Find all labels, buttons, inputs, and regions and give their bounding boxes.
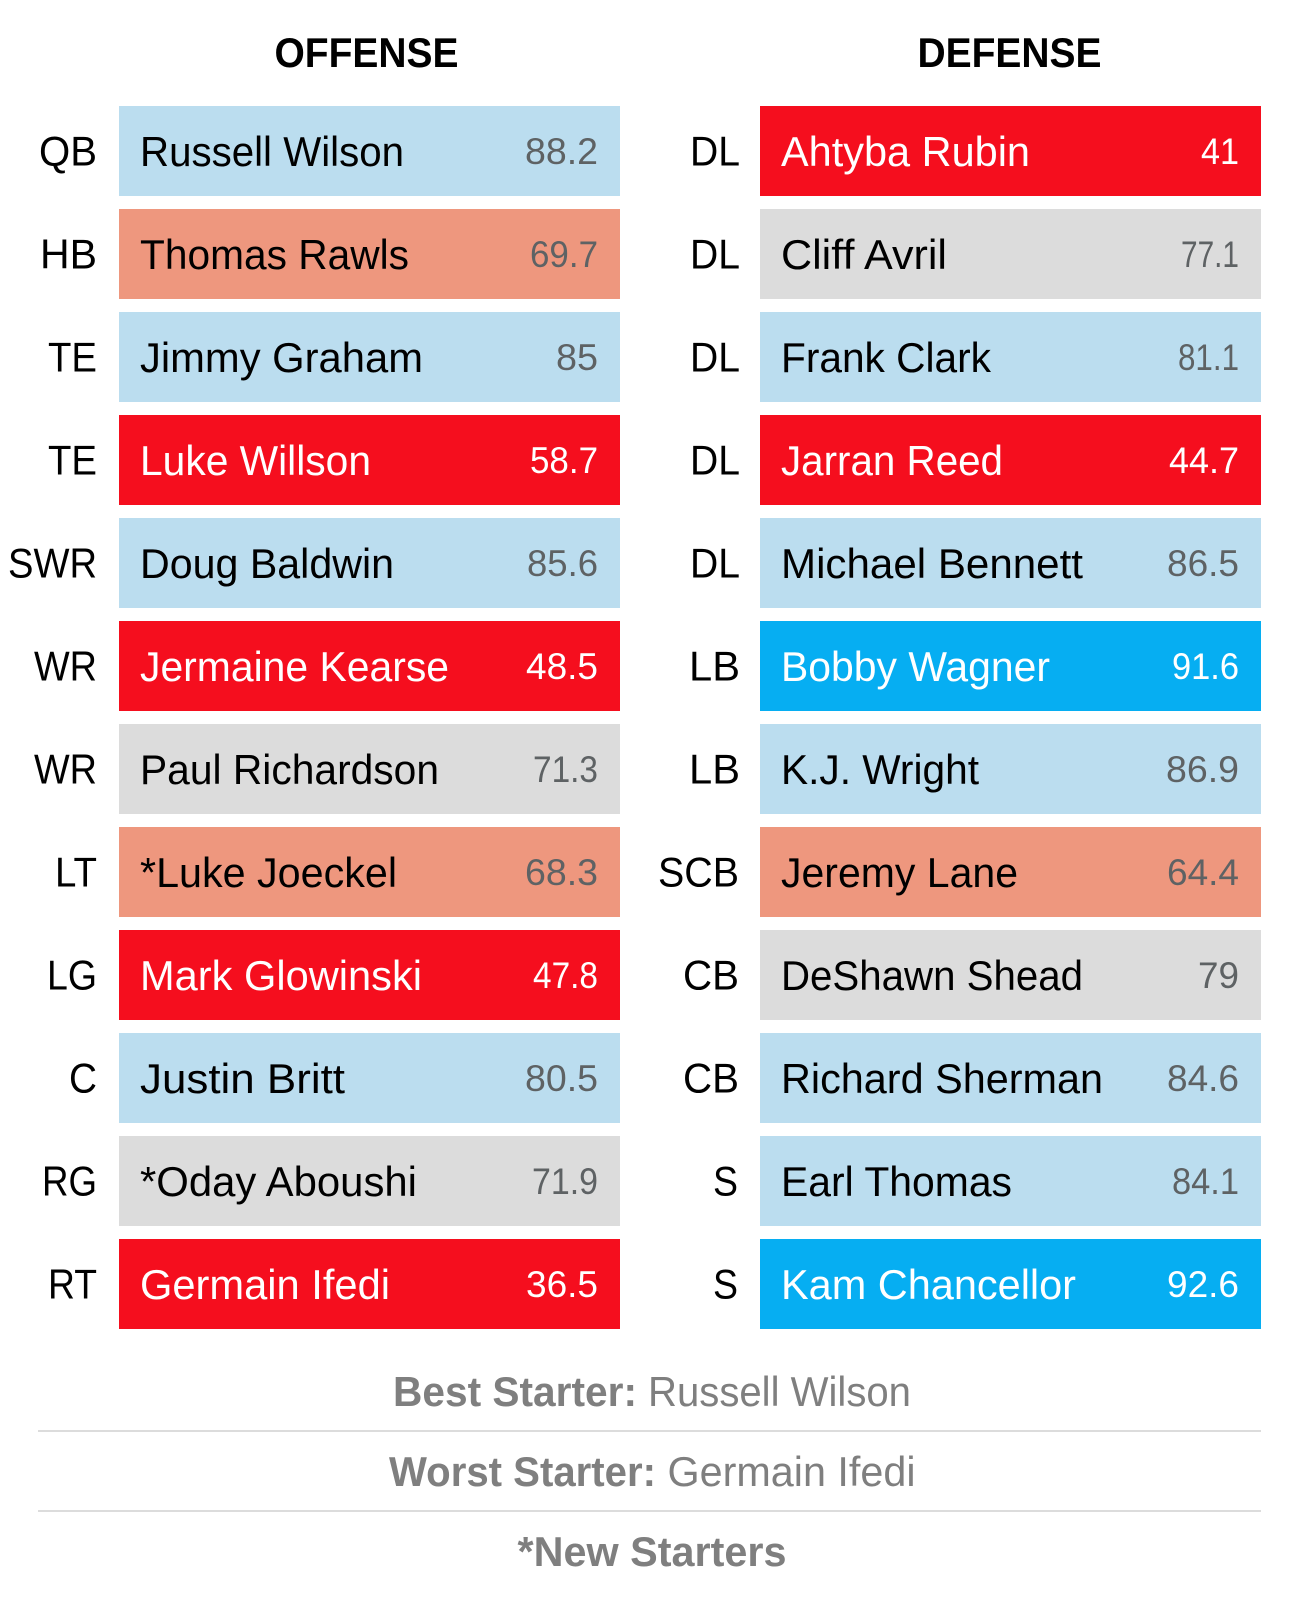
row: TE Luke Willson: 58.7: [530, 440, 598, 481]
row: LT Luke Joeckel: [55, 827, 620, 917]
row: SWR Doug Baldwin: [8, 518, 620, 608]
row: DL Jarran Reed: DL: [690, 436, 740, 484]
row: HB Thomas Rawls: 69.7: [530, 234, 598, 275]
row: DL Michael Bennett: [690, 518, 1261, 608]
row: LG Mark Glowinski: [47, 930, 620, 1020]
text: best starter: Russell Wilson: [648, 1368, 911, 1415]
row: QB Russell Wilson: Russell Wilson: [140, 128, 404, 175]
row: DL Frank Clark: Frank Clark: [781, 334, 992, 381]
row: RT Germain Ifedi: 36.5: [526, 1264, 598, 1305]
row: LB K.J. Wright: 86.9: [1166, 749, 1239, 790]
row: SCB Jeremy Lane: Jeremy Lane: [781, 849, 1018, 896]
row: DL Cliff Avril: 77.1: [1181, 234, 1239, 275]
row: CB Richard Sherman: [683, 1033, 1261, 1123]
row: SCB Jeremy Lane: 64.4: [1167, 852, 1239, 893]
text: worst starter: Worst Starter:: [389, 1448, 656, 1495]
row: DL Jarran Reed: 44.7: [1169, 440, 1239, 481]
row: TE Jimmy Graham: 85: [556, 337, 598, 378]
row: DL Ahtyba Rubin: Ahtyba Rubin: [781, 128, 1030, 175]
row: HB Thomas Rawls: HB: [40, 230, 97, 278]
text: worst starter: Germain Ifedi: [668, 1448, 916, 1495]
row: DL Frank Clark: 81.1: [1178, 337, 1239, 378]
row: DL Frank Clark: [690, 312, 1261, 402]
row: C Justin Britt: [69, 1033, 620, 1123]
row: S Kam Chancellor: [713, 1239, 1261, 1329]
row: RG Oday Aboushi: *Oday Aboushi: [140, 1158, 417, 1205]
row: WR Jermaine Kearse: Jermaine Kearse: [140, 643, 449, 690]
row: TE Luke Willson: [48, 415, 620, 505]
row: LT Luke Joeckel: 68.3: [525, 852, 598, 893]
row: TE Luke Willson: TE: [48, 436, 97, 484]
row: DL Michael Bennett: DL: [690, 540, 740, 586]
row: QB Russell Wilson: [39, 106, 620, 196]
row: RG Oday Aboushi: 71.9: [532, 1161, 598, 1202]
row: RT Germain Ifedi: [48, 1239, 620, 1329]
row: CB Richard Sherman: Richard Sherman: [781, 1055, 1103, 1102]
row: SWR Doug Baldwin: 85.6: [527, 543, 598, 584]
row: S Kam Chancellor: Kam Chancellor: [781, 1261, 1076, 1308]
row: LB K.J. Wright: [689, 724, 1261, 814]
row: S Earl Thomas: [713, 1136, 1261, 1226]
row: LG Mark Glowinski: LG: [47, 952, 97, 998]
row: DL Cliff Avril: Cliff Avril: [781, 231, 947, 278]
row: SCB Jeremy Lane: SCB: [658, 848, 739, 896]
row: SCB Jeremy Lane: [658, 827, 1261, 917]
row: QB Russell Wilson: 88.2: [525, 131, 598, 172]
row: S Kam Chancellor: 92.6: [1167, 1264, 1239, 1305]
row: S Earl Thomas: Earl Thomas: [781, 1158, 1012, 1205]
row: RT Germain Ifedi: RT: [48, 1260, 97, 1308]
row: DL Michael Bennett: Michael Bennett: [781, 540, 1083, 587]
row: WR Paul Richardson: [34, 724, 620, 814]
row: CB DeShawn Shead: [683, 930, 1261, 1020]
row: TE Jimmy Graham: TE: [48, 334, 97, 380]
row: RG Oday Aboushi: [42, 1136, 620, 1226]
row: C Justin Britt: 80.5: [525, 1058, 598, 1099]
row: S Earl Thomas: S: [713, 1158, 738, 1204]
row: RT Germain Ifedi: Germain Ifedi: [140, 1261, 390, 1308]
row: LB Bobby Wagner: LB: [689, 642, 740, 690]
row: LG Mark Glowinski: Mark Glowinski: [140, 952, 422, 999]
row: WR Paul Richardson: Paul Richardson: [140, 746, 439, 793]
row: LB K.J. Wright: K.J. Wright: [781, 746, 979, 793]
row: WR Jermaine Kearse: [34, 621, 620, 711]
row: WR Jermaine Kearse: WR: [34, 642, 97, 690]
row: HB Thomas Rawls: [40, 209, 620, 299]
row: DL Ahtyba Rubin: 41: [1201, 131, 1239, 172]
heading: defense: DEFENSE: [918, 29, 1102, 76]
panel: defense roster: [658, 106, 1261, 1329]
row: QB Russell Wilson: QB: [39, 128, 97, 174]
row: DL Frank Clark: DL: [690, 334, 740, 380]
row: LT Luke Joeckel: LT: [55, 848, 97, 896]
row: S Kam Chancellor: S: [713, 1260, 738, 1308]
row: C Justin Britt: C: [69, 1054, 97, 1102]
row: CB Richard Sherman: 84.6: [1167, 1058, 1239, 1099]
row: RG Oday Aboushi: RG: [42, 1158, 97, 1204]
row: CB Richard Sherman: CB: [683, 1054, 739, 1102]
row: LB K.J. Wright: LB: [689, 746, 740, 792]
row: DL Jarran Reed: [690, 415, 1261, 505]
row: C Justin Britt: Justin Britt: [140, 1055, 345, 1102]
panel: offense roster: [8, 106, 620, 1329]
row: DL Ahtyba Rubin: [690, 106, 1261, 196]
row: S Earl Thomas: 84.1: [1172, 1161, 1239, 1202]
text: best starter: [393, 1368, 911, 1415]
row: TE Jimmy Graham: Jimmy Graham: [140, 334, 423, 381]
row: TE Luke Willson: Luke Willson: [140, 437, 371, 484]
row: DL Cliff Avril: [690, 209, 1261, 299]
row: CB DeShawn Shead: DeShawn Shead: [781, 952, 1083, 999]
row: LG Mark Glowinski: 47.8: [533, 955, 598, 996]
row: CB DeShawn Shead: CB: [683, 952, 739, 998]
row: TE Jimmy Graham: [48, 312, 620, 402]
row: DL Cliff Avril: DL: [690, 230, 740, 278]
row: WR Jermaine Kearse: 48.5: [526, 646, 598, 687]
row: LT Luke Joeckel: *Luke Joeckel: [140, 849, 397, 896]
row: SWR Doug Baldwin: Doug Baldwin: [140, 540, 394, 587]
row: DL Michael Bennett: 86.5: [1167, 543, 1239, 584]
text: worst starter: [389, 1448, 916, 1495]
row: HB Thomas Rawls: Thomas Rawls: [140, 231, 409, 278]
row: WR Paul Richardson: 71.3: [533, 749, 598, 790]
row: LB Bobby Wagner: [689, 621, 1261, 711]
row: SWR Doug Baldwin: SWR: [8, 540, 97, 586]
row: LB Bobby Wagner: Bobby Wagner: [781, 643, 1050, 690]
row: DL Ahtyba Rubin: DL: [690, 128, 740, 174]
row: CB DeShawn Shead: 79: [1198, 955, 1239, 996]
row: DL Jarran Reed: Jarran Reed: [781, 437, 1003, 484]
text: best starter: Best Starter:: [393, 1368, 637, 1415]
text: new starters note: *New Starters: [518, 1528, 786, 1575]
heading: offense: OFFENSE: [274, 29, 458, 76]
row: LB Bobby Wagner: 91.6: [1172, 646, 1239, 687]
row: WR Paul Richardson: WR: [34, 746, 97, 792]
